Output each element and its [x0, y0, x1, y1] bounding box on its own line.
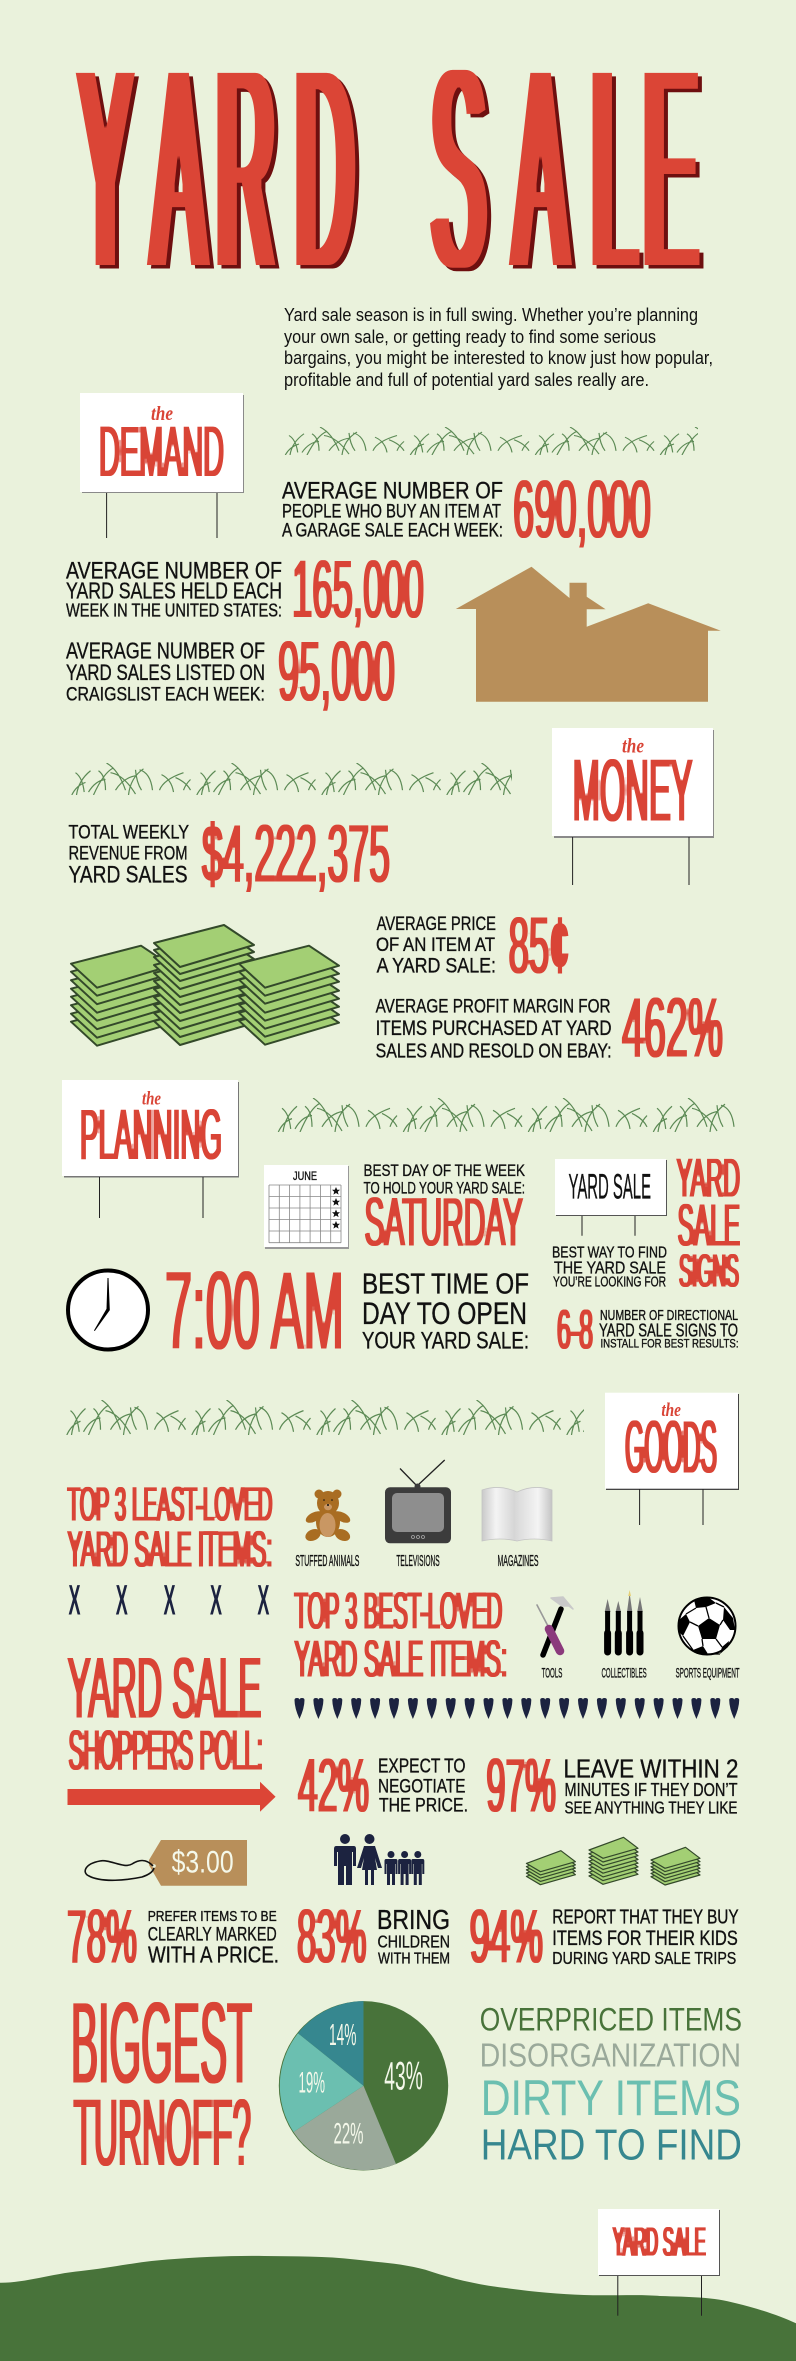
stat: 462%: ITEMS PURCHASED AT YARD: [376, 1017, 612, 1040]
stat: 85 cents: A YARD SALE:: [377, 955, 496, 978]
stat: 6-8 directional signs: [557, 1298, 738, 1360]
stat: 97% leave: SEE ANYTHING THEY LIKE: [564, 1797, 738, 1817]
stat: 7:00 am: DAY TO OPEN: [362, 1295, 527, 1331]
stat: 94%: [470, 1895, 739, 1980]
stat: 95,000: [66, 624, 395, 718]
icon: price tag: $3.00: [172, 1844, 234, 1880]
panel: biggest turnoff: TURNOFF?: [74, 2080, 251, 2186]
stat: 42% negotiate: 42%: [298, 1744, 369, 1829]
stat: total weekly revenue: TOTAL WEEKLY: [68, 821, 189, 843]
stat: total weekly revenue: [68, 809, 390, 900]
icon: calendar: [264, 1165, 349, 1249]
stat: yard sale signs: YOU’RE LOOKING FOR: [553, 1275, 666, 1291]
stat: 97% leave: 97%: [486, 1744, 556, 1829]
legend: turnoffs: DISORGANIZATION: [480, 2037, 741, 2074]
item labels: least-loved: TELEVISIONS: [396, 1553, 440, 1570]
stat: 42% negotiate: EXPECT TO: [378, 1755, 466, 1777]
panel: biggest turnoff: BIGGEST: [71, 1979, 252, 2107]
row of x marks: X: [210, 1576, 222, 1624]
stat: 83%: 83%: [297, 1895, 366, 1980]
panel: the goods: [67, 1393, 740, 1719]
icon: house: [456, 567, 721, 702]
panel: the money: $4,222,375: [202, 809, 390, 900]
stat: 690,000: A GARAGE SALE EACH WEEK:: [282, 520, 503, 542]
stat: 6-8 directional signs: 6-8: [557, 1298, 593, 1360]
stat: 97% leave: LEAVE WITHIN 2: [564, 1753, 738, 1783]
intro text: bargains, you might be interested to know just how popular,: [284, 348, 713, 368]
sign: closing yard sale: [598, 2209, 720, 2316]
panel: the goods: MAGAZINES: [498, 1553, 538, 1570]
icon: collectibles: [605, 1590, 643, 1652]
row of x marks: X: [164, 1576, 176, 1624]
stat: 78%: 78%: [67, 1895, 137, 1980]
sign: the goods: [605, 1393, 739, 1525]
stat: total weekly revenue: YARD SALES: [68, 862, 188, 889]
legend: turnoffs: DIRTY ITEMS: [481, 2070, 741, 2126]
sign: the money: [552, 728, 714, 885]
stat: 78%: CLEARLY MARKED: [148, 1924, 277, 1946]
stat: 42% negotiate: NEGOTIATE: [378, 1776, 466, 1798]
panel: shoppers poll: YARD SALE: [68, 1640, 262, 1736]
icon: stacks of money: [71, 925, 339, 1046]
panel: the demand: 95,000: [278, 624, 395, 718]
icon: tools: [537, 1597, 573, 1655]
icon: teddy bear: [303, 1490, 352, 1543]
stat: 42% negotiate: THE PRICE.: [379, 1795, 468, 1817]
sign: the planning: [62, 1080, 239, 1218]
stat: 6-8 directional signs: NUMBER OF DIRECTIONAL: [600, 1308, 738, 1324]
heading: biggest turnoff: [71, 1979, 252, 2186]
row of heart marks: [294, 1698, 739, 1719]
panel: the goods: X: [257, 1576, 270, 1624]
panel: the planning: PLANNING: [80, 1096, 222, 1175]
panel: biggest turnoff: [71, 1979, 742, 2186]
stat: yard sale signs: [552, 1147, 740, 1297]
item labels: least-loved: STUFFED ANIMALS: [295, 1553, 359, 1570]
panel: the demand: [66, 393, 779, 718]
stat: 6-8 directional signs: INSTALL FOR BEST RESULTS:: [600, 1337, 738, 1351]
heading: least-loved items: [68, 1478, 272, 1578]
stat: 97% leave: [486, 1744, 738, 1829]
sign: small yard sale: [555, 1159, 667, 1236]
icon: calendar: JUNE: [293, 1169, 317, 1183]
icon: soccer ball: [678, 1597, 736, 1654]
stat: 94%: ITEMS FOR THEIR KIDS: [552, 1927, 738, 1950]
hill: [0, 2256, 796, 2361]
intro text: profitable and full of potential yard sales really are.: [284, 370, 649, 390]
legend: turnoffs: [480, 2002, 742, 2169]
stat: 165,000: WEEK IN THE UNITED STATES:: [66, 600, 282, 621]
stat: 95,000: CRAIGSLIST EACH WEEK:: [66, 684, 265, 706]
stat: saturday: TO HOLD YOUR YARD SALE:: [364, 1178, 525, 1197]
panel: the goods: YARD SALE ITEMS:: [68, 1521, 272, 1578]
stat: 462%: SALES AND RESOLD ON EBAY:: [376, 1040, 612, 1062]
stat: 85 cents: [376, 900, 570, 989]
panel: shoppers poll: SHOPPERS POLL:: [68, 1718, 263, 1782]
sign: the goods: the: [661, 1400, 681, 1421]
arrow: [68, 1782, 276, 1812]
sign: the planning: the: [142, 1088, 161, 1109]
icon: family: [334, 1834, 424, 1885]
icon: price tag: [85, 1840, 247, 1886]
stat: 78%: WITH A PRICE.: [148, 1941, 279, 1967]
icon: television: [385, 1460, 451, 1543]
stat: 83%: WITH THEM: [378, 1950, 450, 1967]
stat: 94%: 94%: [470, 1895, 543, 1980]
icon: clock: [68, 1270, 148, 1350]
panel: the planning: SATURDAY: [364, 1184, 523, 1261]
stat: 95,000: AVERAGE NUMBER OF: [66, 637, 265, 663]
pie chart: 43%: [384, 2054, 423, 2098]
row of x marks: X: [68, 1576, 81, 1624]
panel: the demand: DEMAND: [99, 413, 224, 492]
stat: 165,000: [66, 544, 424, 635]
stat: total weekly revenue: REVENUE FROM: [68, 842, 188, 864]
grass: [278, 1098, 735, 1132]
grass: [284, 427, 698, 455]
stat: 83%: BRING: [377, 1904, 450, 1935]
legend: turnoffs: HARD TO FIND: [481, 2120, 742, 2169]
intro text: Yard sale season is in full swing. Whether you’re planning: [284, 305, 698, 325]
sign: the demand: the: [151, 403, 173, 425]
panel: the planning: [62, 1080, 772, 1372]
title: YARD SALE: [79, 8, 697, 329]
stat: 6-8 directional signs: YARD SALE SIGNS TO: [599, 1321, 738, 1341]
stat: 85 cents: AVERAGE PRICE: [377, 913, 496, 935]
stat: 690,000: AVERAGE NUMBER OF: [282, 477, 503, 504]
stat: saturday: BEST DAY OF THE WEEK: [364, 1161, 526, 1180]
item labels: best-loved: [542, 1666, 740, 1681]
stat: 83%: CHILDREN: [378, 1931, 450, 1951]
stat: 690,000: [282, 464, 651, 555]
stat: 7:00 am: YOUR YARD SALE:: [362, 1327, 529, 1354]
stat: 165,000: AVERAGE NUMBER OF: [66, 557, 282, 584]
stat: 7:00 am: 7:00 AM: [165, 1249, 344, 1372]
stat: 462%: [376, 981, 723, 1075]
intro text: your own sale, or getting ready to find some serious: [284, 327, 656, 347]
item labels: best-loved: TOOLS: [542, 1666, 562, 1681]
pie chart: 14%: [329, 2017, 356, 2052]
item labels: best-loved: COLLECTIBLES: [602, 1666, 647, 1681]
stat: 690,000: PEOPLE WHO BUY AN ITEM AT: [282, 500, 501, 522]
stat: saturday: [364, 1161, 526, 1261]
stat: 97% leave: MINUTES IF THEY DON’T: [564, 1779, 738, 1800]
stat: 95,000: YARD SALES LISTED ON: [66, 660, 265, 685]
stat: 165,000: YARD SALES HELD EACH: [66, 577, 282, 603]
stat: 78%: PREFER ITEMS TO BE: [148, 1908, 277, 1925]
grass: [71, 763, 512, 795]
intro text: [284, 305, 713, 390]
row of x marks: X: [116, 1576, 128, 1624]
sign: small yard sale: YARD SALE: [568, 1167, 651, 1207]
pie chart: 22%: [334, 2117, 364, 2150]
panel: the goods: YARD SALE ITEMS:: [294, 1631, 507, 1689]
stat: 7:00 am: BEST TIME OF: [362, 1268, 529, 1300]
sign: the money: the: [622, 734, 644, 758]
legend: turnoffs: OVERPRICED ITEMS: [480, 2002, 742, 2038]
pie chart: [279, 2001, 448, 2170]
row of x marks: [68, 1576, 270, 1624]
pie chart: 19%: [298, 2067, 325, 2100]
stat: 94%: DURING YARD SALE TRIPS: [552, 1948, 736, 1968]
icon: small money stacks: [526, 1837, 700, 1885]
stat: 85 cents: OF AN ITEM AT: [376, 934, 495, 956]
stat: yard sale signs: BEST WAY TO FIND: [552, 1244, 667, 1261]
panel: the money: [68, 728, 723, 1075]
panel: the demand: 165,000: [292, 544, 424, 635]
heading: best-loved items: [294, 1582, 507, 1689]
panel: the goods: TOP 3 LEAST-LOVED: [68, 1478, 272, 1532]
stat: yard sale signs: THE YARD SALE: [554, 1257, 666, 1277]
stat: 462%: AVERAGE PROFIT MARGIN FOR: [376, 996, 611, 1017]
panel: the goods: TOP 3 BEST-LOVED: [294, 1582, 502, 1640]
panel: shoppers poll: [67, 1640, 739, 1980]
stat: 94%: REPORT THAT THEY BUY: [552, 1906, 739, 1928]
panel: the money: 85¢: [509, 900, 570, 989]
heading: yard sale shoppers poll: [68, 1640, 263, 1782]
grass: [66, 1400, 584, 1435]
sign: the demand: [80, 393, 244, 538]
icon: magazine: [482, 1487, 552, 1541]
item labels: least-loved: [295, 1553, 538, 1570]
